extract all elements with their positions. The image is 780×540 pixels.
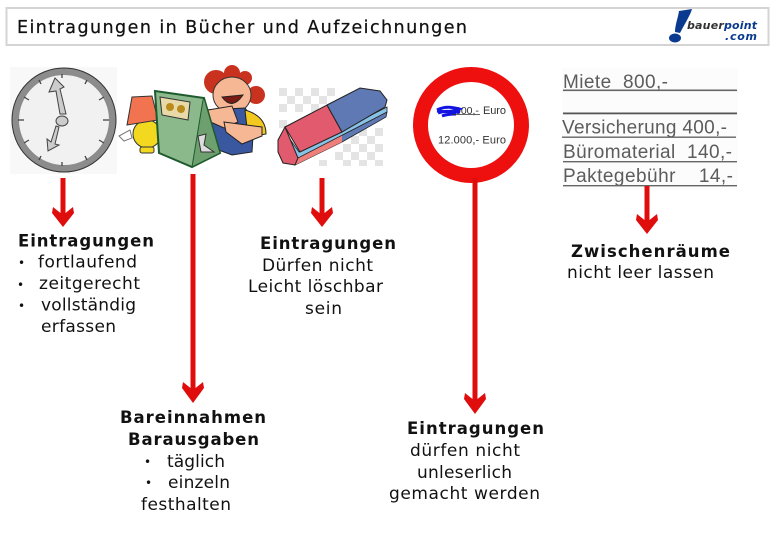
- scribbled-out amount: 000,-: [455, 105, 479, 117]
- lamp: [119, 96, 161, 153]
- text block: unleserlich: gemacht werden: [389, 484, 540, 504]
- text block: Bareinnahmen: •: [145, 476, 152, 490]
- ledger image: Miete 800,-: [563, 72, 668, 93]
- text block: Bareinnahmen: täglich: [167, 452, 225, 472]
- text block: Eintragungen list: zeitgerecht: [39, 274, 140, 294]
- icon: eraser: [278, 88, 387, 166]
- text block: Bareinnahmen: einzeln: [168, 473, 230, 493]
- arrow: ledger: [636, 186, 658, 234]
- arrow: sign: [464, 178, 486, 414]
- ledger image: Paktegebühr 14,-: [563, 166, 733, 187]
- amount label bottom: 12.000,- Euro: [438, 134, 506, 146]
- text block: unleserlich: [389, 419, 544, 504]
- text block: löschbar: [248, 234, 396, 319]
- text block: Zwischenräume: [567, 242, 730, 283]
- ledger image: Versicherung 400,-: [562, 118, 727, 138]
- text block: Eintragungen list: vollständig: [41, 296, 136, 316]
- icon: no-entry sign with amounts: [420, 74, 522, 176]
- ledger image: Büromaterial 140,-: [563, 142, 732, 163]
- ledger image: [562, 68, 738, 190]
- text block: Bareinnahmen: Barausgaben: [128, 430, 259, 449]
- icon: woman at cash register: [119, 65, 266, 167]
- text block: Eintragungen list: •: [18, 299, 25, 313]
- text block: löschbar: Dürfen nicht: [262, 256, 373, 276]
- text block: Zwischenräume: nicht leer lassen: [567, 263, 714, 283]
- logo: bauerpoint.com: .com: [725, 30, 757, 43]
- text block: unleserlich: dürfen nicht: [410, 441, 520, 461]
- arrow: clock: [52, 178, 74, 227]
- text block: Bareinnahmen: festhalten: [141, 495, 231, 515]
- title: Eintragungen in Bücher und Aufzeichnungen: [17, 18, 467, 38]
- text block: Eintragungen list: •: [18, 256, 25, 270]
- text block: Eintragungen list: Eintragungen: [18, 232, 154, 250]
- title bar: [6, 8, 768, 45]
- icon: clock: [10, 67, 117, 174]
- text block: Eintragungen list: fortlaufend: [38, 252, 137, 272]
- text block: Zwischenräume: Zwischenräume: [571, 242, 730, 261]
- text block: löschbar: sein: [305, 299, 342, 319]
- arrow: cash register: [182, 174, 204, 403]
- text block: Eintragungen list: •: [17, 278, 24, 292]
- woman: [204, 65, 266, 155]
- text block: unleserlich: unleserlich: [417, 463, 512, 483]
- amount label top: Euro: [483, 105, 506, 117]
- logo: bauerpoint.com: bauerpoint: [687, 19, 758, 32]
- text block: löschbar: Eintragungen: [260, 234, 396, 253]
- text block: Eintragungen list: erfassen: [41, 317, 116, 337]
- text block: Bareinnahmen: •: [144, 455, 151, 469]
- arrow: eraser: [311, 178, 333, 227]
- logo: bauerpoint.com: [669, 9, 758, 43]
- text block: Bareinnahmen: Bareinnahmen: [120, 408, 266, 427]
- text block: unleserlich: Eintragungen: [407, 419, 544, 438]
- cash register: [155, 91, 220, 167]
- text block: Eintragungen list: [17, 232, 154, 337]
- text block: Bareinnahmen: [120, 408, 266, 515]
- text block: löschbar: Leicht löschbar: [248, 277, 383, 297]
